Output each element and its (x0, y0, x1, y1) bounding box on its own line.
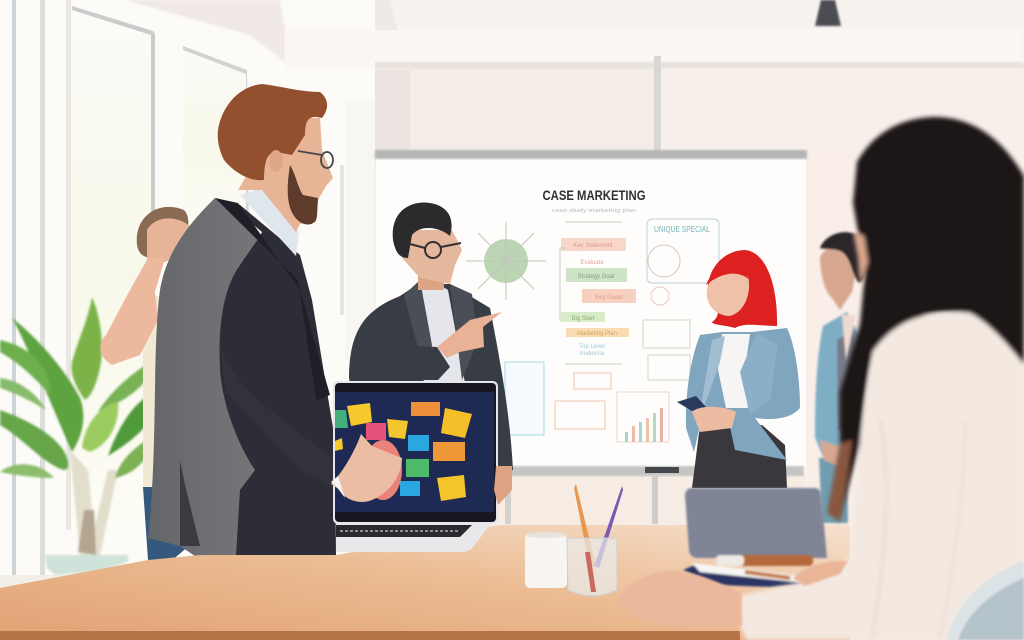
red-haired woman (677, 250, 800, 488)
whiteboard labelled boxes: Marketing Plan (577, 331, 617, 337)
grey back of jacket (148, 198, 336, 556)
ear (269, 150, 283, 172)
glasses (298, 151, 333, 168)
whiteboard labelled boxes: Big Start (571, 316, 595, 322)
face (707, 271, 749, 316)
notebook with pens (683, 555, 820, 587)
windows (0, 0, 375, 595)
main man: bearded with dark blazer (148, 84, 345, 556)
whiteboard labelled boxes: Key Statement (573, 243, 613, 249)
whiteboard bar chart (625, 408, 663, 442)
presenter with glasses, navy jacket (349, 203, 513, 470)
jacket (686, 328, 800, 460)
dark sleeve (215, 198, 336, 556)
laptop (333, 381, 498, 552)
mug (525, 532, 567, 588)
shirt (737, 312, 1024, 640)
laptop keyboard base (336, 522, 492, 552)
whiteboard top-right sketch (643, 219, 719, 380)
laptop sticky notes (335, 402, 472, 501)
whiteboard wheel diagram (466, 222, 546, 300)
woman in far background (815, 232, 865, 523)
lapel (215, 198, 330, 400)
whiteboard bottom boxes (505, 362, 669, 442)
face sliver (853, 232, 868, 285)
whiteboard (375, 150, 807, 524)
phone and hands (677, 396, 706, 411)
pencil cup (567, 484, 623, 596)
plant (0, 297, 150, 575)
hands on laptop (331, 434, 512, 505)
whiteboard subtitle: case study marketing plan (552, 208, 636, 214)
whiteboard labelled boxes: Strategy Goal (578, 274, 614, 280)
beard (288, 165, 318, 224)
hair (827, 117, 1024, 522)
whiteboard: UNIQUE SPECIAL (654, 225, 710, 234)
hair (708, 250, 777, 328)
whiteboard labelled boxes (561, 238, 636, 357)
woman's hand on table (620, 561, 848, 627)
neck and face (238, 118, 333, 232)
ceiling lamp (815, 0, 841, 26)
pants (692, 425, 787, 488)
chair back (947, 561, 1024, 640)
hair (218, 84, 327, 180)
whiteboard labelled boxes: Key Goals (595, 295, 623, 301)
grey laptop foreground (685, 488, 827, 558)
whiteboard labelled boxes: Audience (579, 351, 605, 357)
table (0, 525, 850, 640)
woman foreground blurred (737, 117, 1024, 640)
whiteboard labelled boxes: Top Level (579, 344, 605, 350)
man on left in background, hand on head (100, 207, 194, 562)
whiteboard labelled boxes: Evaluate (580, 260, 604, 266)
whiteboard title: CASE MARKETING (542, 187, 646, 203)
